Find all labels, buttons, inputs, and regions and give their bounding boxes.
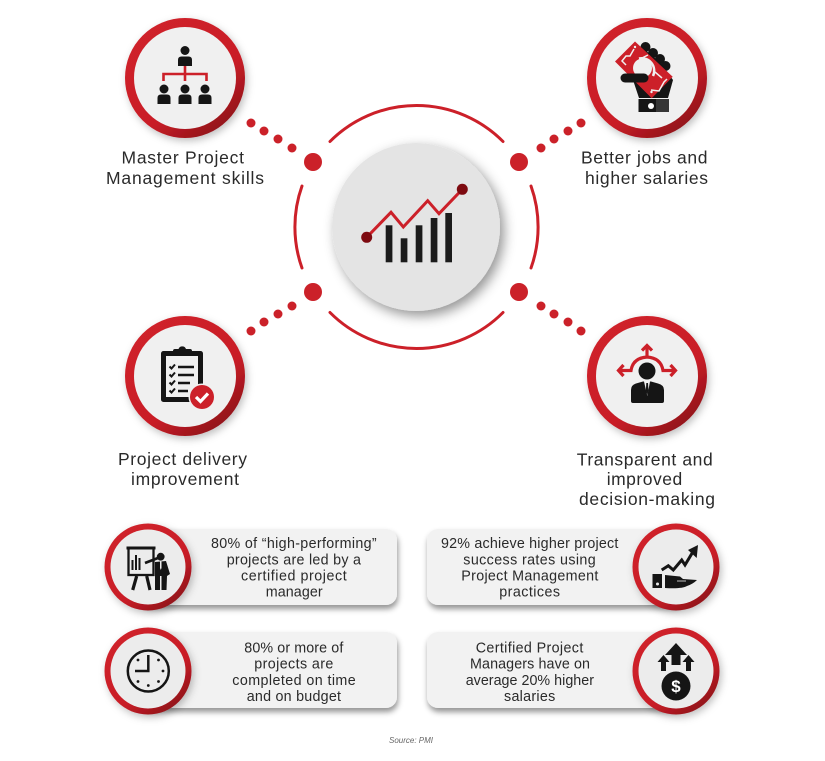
text: practices [499,585,560,601]
text: Project Management [461,569,598,585]
icon: hand with rising arrow [652,545,698,588]
label: master project management skills: Management skills [106,168,264,188]
text: manager [266,585,323,601]
text [211,536,377,601]
panel: higher salaries stat [427,628,720,714]
source note: Source: PMI [389,736,434,745]
panel: high-performing stat [104,524,397,610]
text: 80% of “high-performing” [211,536,377,552]
icon: team hierarchy [125,18,245,138]
label: transparent and improved decision-making: improved [607,469,682,489]
icon: decision maker with arrows [587,316,707,436]
dotted connector: top left [246,118,322,171]
label: project delivery improvement [118,449,247,489]
label: better jobs and higher salaries: higher salaries [585,168,708,188]
text: and on budget [247,689,341,705]
central growth chart icon [332,143,500,311]
text: salaries [504,689,555,705]
label: project delivery improvement: improvement [131,469,239,489]
panel: on time and budget stat [104,628,397,714]
dotted connector: bottom left [246,283,322,336]
label: better jobs and higher salaries [581,148,708,188]
icon: presenter at board [126,546,170,590]
label: transparent and improved decision-making: Transparent and [577,450,713,470]
dotted connector: top right [510,118,586,171]
connector ring around central icon [295,106,538,348]
label: project delivery improvement: Project delivery [118,449,247,469]
dotted connector: bottom right [510,283,586,336]
text [441,536,618,601]
text: projects are led by a [227,552,361,568]
label: transparent and improved decision-making [577,450,715,509]
text: Managers have on [470,657,590,673]
label: better jobs and higher salaries: Better jobs and [581,148,708,168]
text [232,641,356,705]
text: success rates using [463,552,596,568]
text: average 20% higher [466,673,594,689]
text: projects are [254,657,333,673]
icon: money with up arrows: $ [671,677,681,696]
icon: clipboard with checklist [125,316,245,436]
text: completed on time [232,673,356,689]
label: master project management skills [106,148,264,188]
text: certified project [241,569,347,585]
panel: success rates stat [427,524,720,610]
icon: clock [128,650,169,692]
label: transparent and improved decision-making: decision-making [579,489,715,509]
label: master project management skills: Master Project [122,148,244,168]
text [466,641,594,705]
icon: money with up arrows [658,643,694,700]
text: 92% achieve higher project [441,536,618,552]
icon: hand holding money [587,18,707,138]
text: Certified Project [476,641,583,657]
text: 80% or more of [244,641,343,657]
